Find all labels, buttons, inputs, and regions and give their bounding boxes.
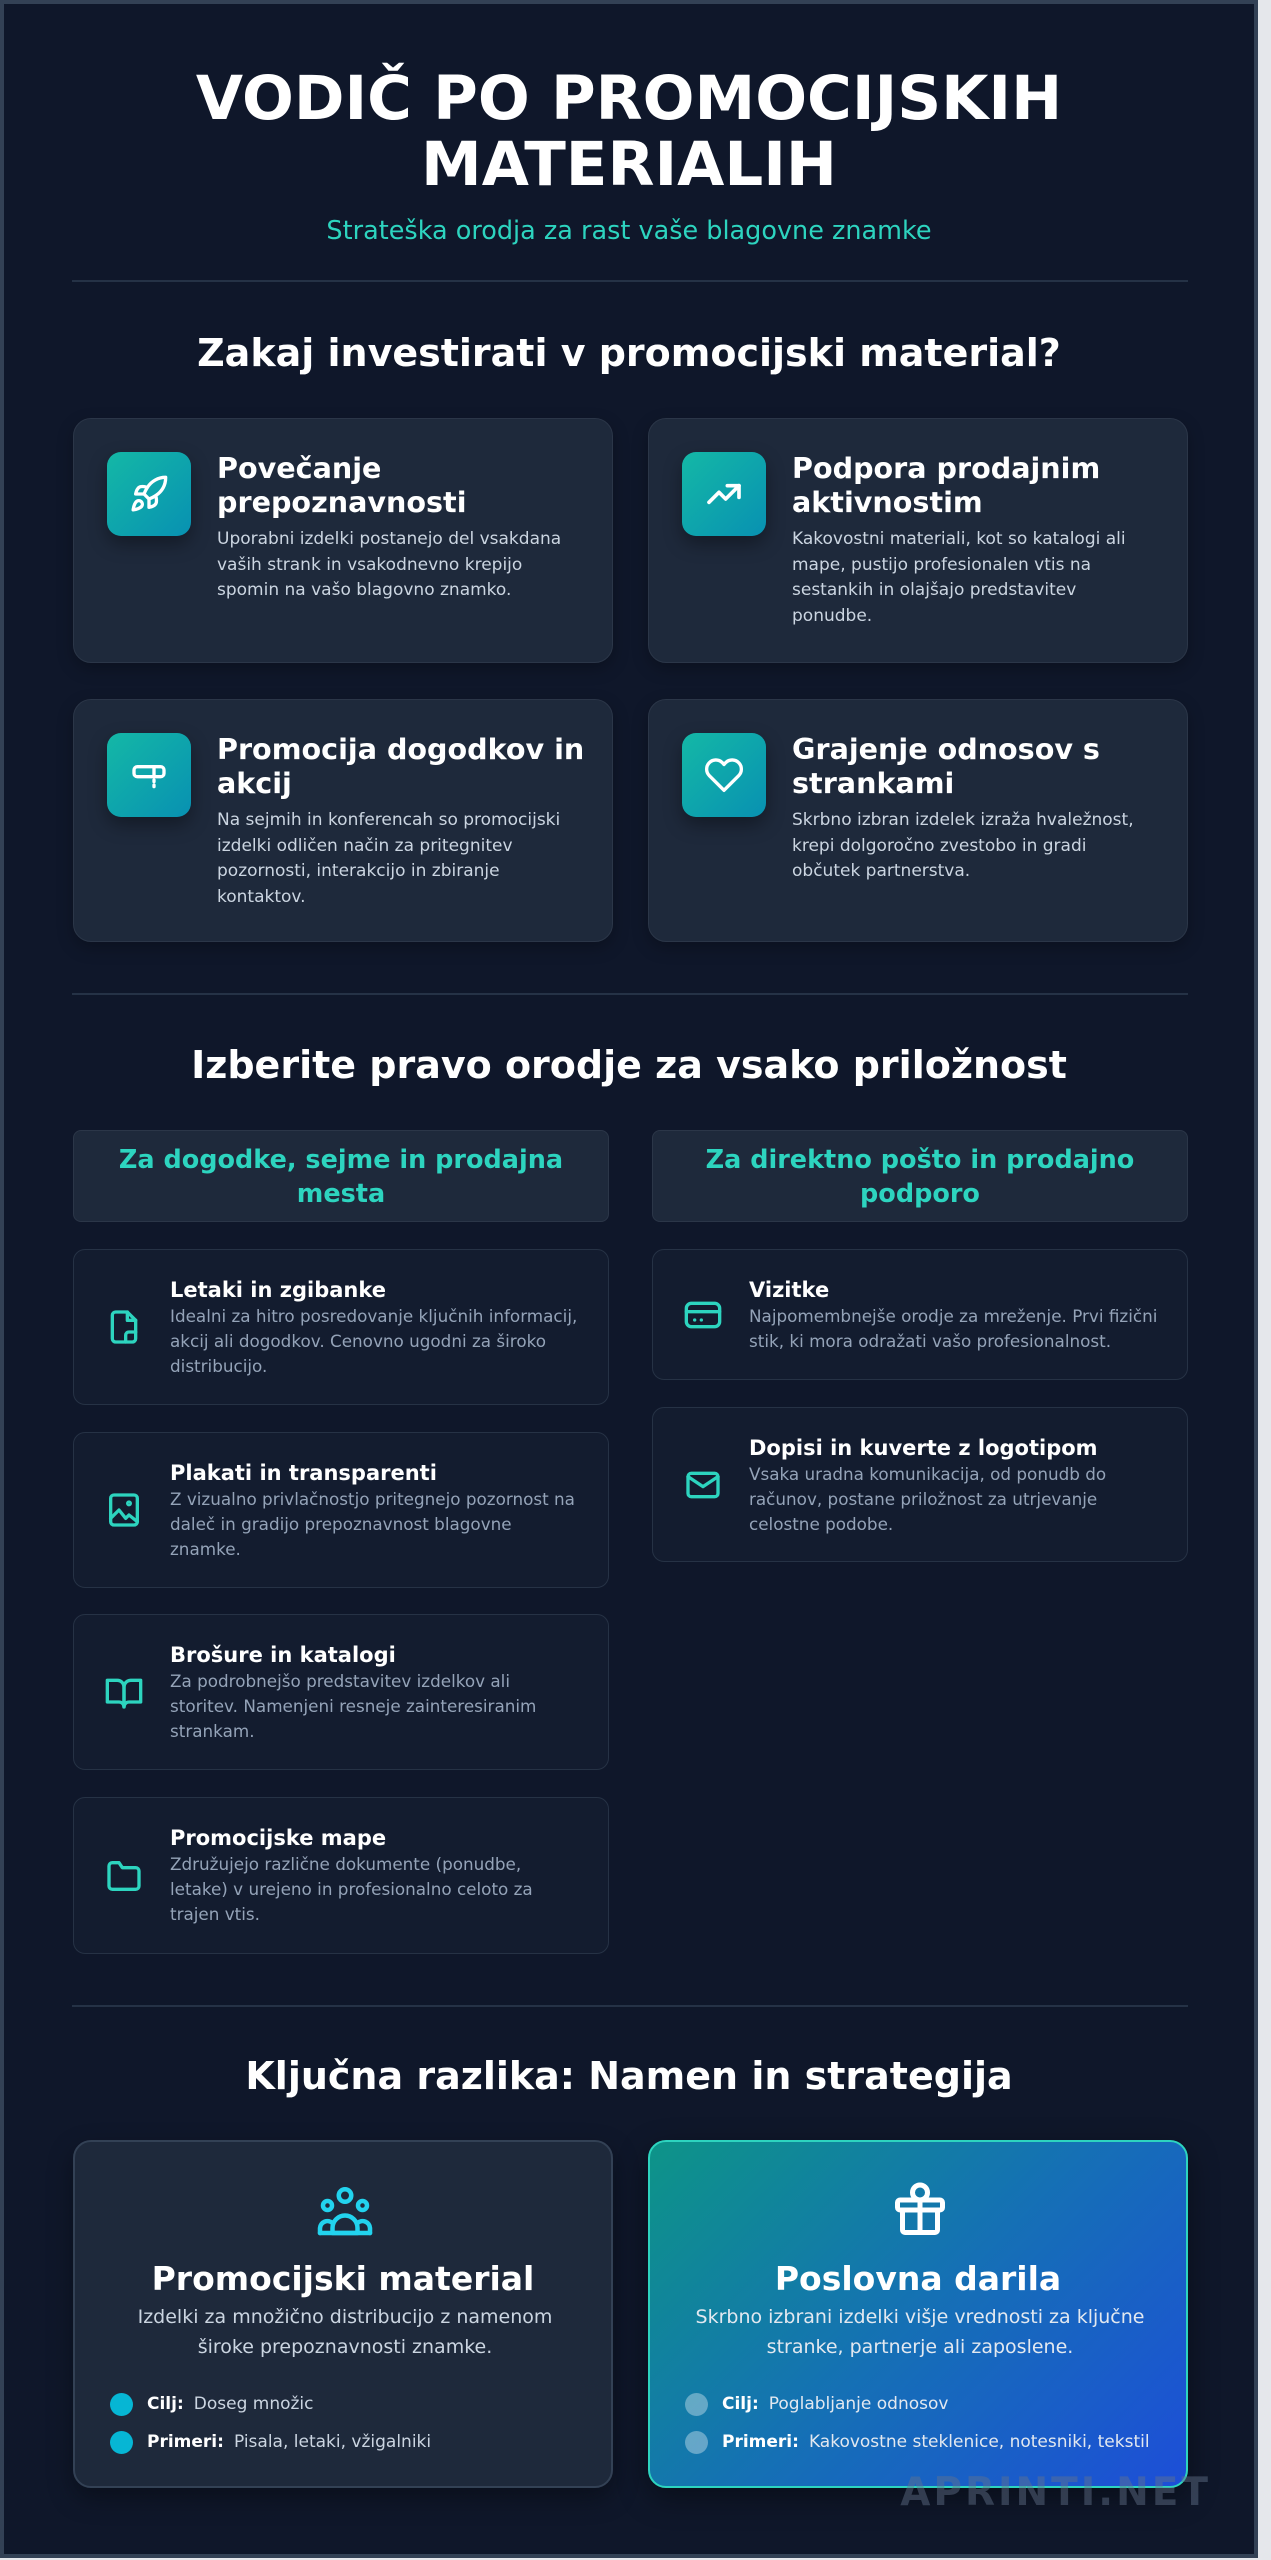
text: sales support [792,451,1126,626]
description [696,2306,1144,2358]
tool: business cards [652,1249,1188,1380]
text: posters [170,1461,575,1559]
text: brochures: storitev. Namenjeni resneje zainteresiranim [170,1696,536,1716]
text: posters: Z vizualno privlačnostjo pritegnejo pozornost na [170,1489,575,1509]
text: events: akcij [217,766,292,800]
title: Poslovna darila [775,2259,1061,2298]
text: business cards [749,1278,1157,1351]
title [196,62,1062,200]
text: business cards: Vizitke [749,1278,829,1302]
text: letterheads: Vsaka uradna komunikacija, od ponudb do [749,1464,1106,1484]
bullet: examples: Primeri: [147,2432,224,2452]
text: awareness: Povečanje [217,451,381,485]
text: folders: Promocijske mape [170,1826,386,1850]
text: events: Promocija dogodkov in [217,732,584,766]
text: folders: Združujejo različne dokumente (ponudbe, [170,1854,521,1874]
heading: why invest: Zakaj investirati v promocijski material? [197,331,1061,375]
description: stranke, partnerje ali zaposlene. [767,2336,1073,2358]
bullet: goal [685,2393,948,2416]
text: awareness: Uporabni izdelki postanejo del vsakdana vaših strank in vsakodnevno krepijo spomin na vašo blagovno znamko. [217,529,561,600]
description [138,2306,552,2358]
text: brochures: Brošure in katalogi [170,1643,396,1667]
text: folders: trajen vtis. [170,1904,260,1924]
text: letterheads [749,1436,1106,1534]
icon: mail [686,1472,720,1498]
description: Izdelki za množično distribucijo z namenom [138,2306,552,2328]
title: VODIČ PO PROMOCIJSKIH [196,63,1062,134]
column header: events: Za dogodke, sejme in prodajna [119,1145,563,1175]
icon: folder [107,1861,141,1891]
text: folders: letake) v urejeno in profesionalno celoto za [170,1879,533,1899]
bullet: goal [110,2393,314,2416]
text: flyers [170,1278,577,1376]
panel: promotional material [73,2140,613,2488]
text: flyers: Letaki in zgibanke [170,1278,386,1302]
text: brochures: strankam. [170,1721,255,1741]
icon: card [684,1302,722,1328]
text: letterheads: računov, postane priložnost za utrjevanje [749,1489,1097,1509]
text: flyers: Idealni za hitro posredovanje ključnih informacij, [170,1306,577,1326]
text: relationships: strankami [792,766,954,800]
subtitle: Strateška orodja za rast vaše blagovne znamke [326,216,932,246]
title: MATERIALIH [421,129,837,200]
text: flyers: distribucijo. [170,1356,267,1376]
text: posters: daleč in gradijo prepoznavnost blagovne [170,1514,512,1534]
bullet: examples [110,2431,431,2454]
title: Promocijski material [152,2259,534,2298]
text: sales support: aktivnostim [792,485,983,519]
heading: key difference: Ključna razlika: Namen in strategija [245,2054,1013,2098]
description: Skrbno izbrani izdelki višje vrednosti za ključne [696,2306,1144,2328]
text: letterheads: celostne podobe. [749,1514,893,1534]
column header: direct mail [652,1130,1188,1222]
bullet: goal: Doseg množic [194,2394,314,2414]
description: široke prepoznavnosti znamke. [198,2336,492,2358]
text: relationships [792,732,1134,881]
bullet: examples [685,2431,1150,2454]
text: posters: znamke. [170,1539,241,1559]
bullet: goal: Poglabljanje odnosov [769,2394,948,2414]
text: awareness [217,451,561,600]
tool: brochures [73,1614,609,1770]
text: business cards: stik, ki mora odražati vašo profesionalnost. [749,1331,1111,1351]
text: awareness: prepoznavnosti [217,485,466,519]
text: letterheads: Dopisi in kuverte z logotipom [749,1436,1098,1460]
icon: trending up [682,452,766,536]
bullet: examples: Primeri: [722,2432,799,2452]
text: sales support: Podpora prodajnim [792,451,1100,485]
text: relationships: Skrbno izbran izdelek izraža hvaležnost, krepi dolgoročno zvestobo in gradi občutek partnerstva. [792,810,1134,881]
panel: awareness [73,418,613,663]
icon: rocket [107,452,191,536]
column header: direct mail: Za direktno pošto in prodajno [706,1145,1134,1175]
tool: letterheads [652,1407,1188,1562]
panel: relationships [648,699,1188,942]
column header: direct mail: podporo [860,1179,980,1209]
tool: posters [73,1432,609,1588]
text: events [217,732,584,906]
text: folders [170,1826,533,1924]
icon: users [318,2187,372,2236]
text: posters: Plakati in transparenti [170,1461,437,1485]
icon: heart [682,733,766,817]
text: brochures: Za podrobnejšo predstavitev izdelkov ali [170,1671,510,1691]
text: business cards: Najpomembnejše orodje za mreženje. Prvi fizični [749,1306,1157,1326]
bullet: examples: Kakovostne steklenice, notesniki, tekstil [809,2432,1150,2452]
tool: folders [73,1797,609,1954]
text: flyers: akcij ali dogodkov. Cenovno ugodni za široko [170,1331,546,1351]
icon: file [110,1310,138,1344]
column header: events [73,1130,609,1222]
text: events: Na sejmih in konferencah so promocijski izdelki odličen način za pritegnitev pozornosti, interakcijo in zbiranje kontaktov. [217,810,560,906]
text: brochures [170,1643,536,1741]
watermark: APRINTI.NET [900,2470,1211,2515]
panel: events [73,699,613,942]
column header: events: mesta [297,1179,385,1209]
panel: business gifts [648,2140,1188,2488]
icon: image [108,1493,140,1527]
icon: gift [895,2182,945,2235]
bullet: goal: Cilj: [722,2394,759,2414]
tool: flyers [73,1249,609,1405]
icon: sign [107,733,191,817]
panel: sales support [648,418,1188,663]
bullet: examples: Pisala, letaki, vžigalniki [234,2432,431,2452]
bullet: goal: Cilj: [147,2394,184,2414]
text: sales support: Kakovostni materiali, kot so katalogi ali mape, pustijo profesionalen vtis na sestankih in olajšajo predstavitev ponudbe. [792,529,1126,626]
heading: choose tool: Izberite pravo orodje za vsako priložnost [191,1043,1067,1087]
text: relationships: Grajenje odnosov s [792,732,1100,766]
icon: book [106,1678,142,1709]
